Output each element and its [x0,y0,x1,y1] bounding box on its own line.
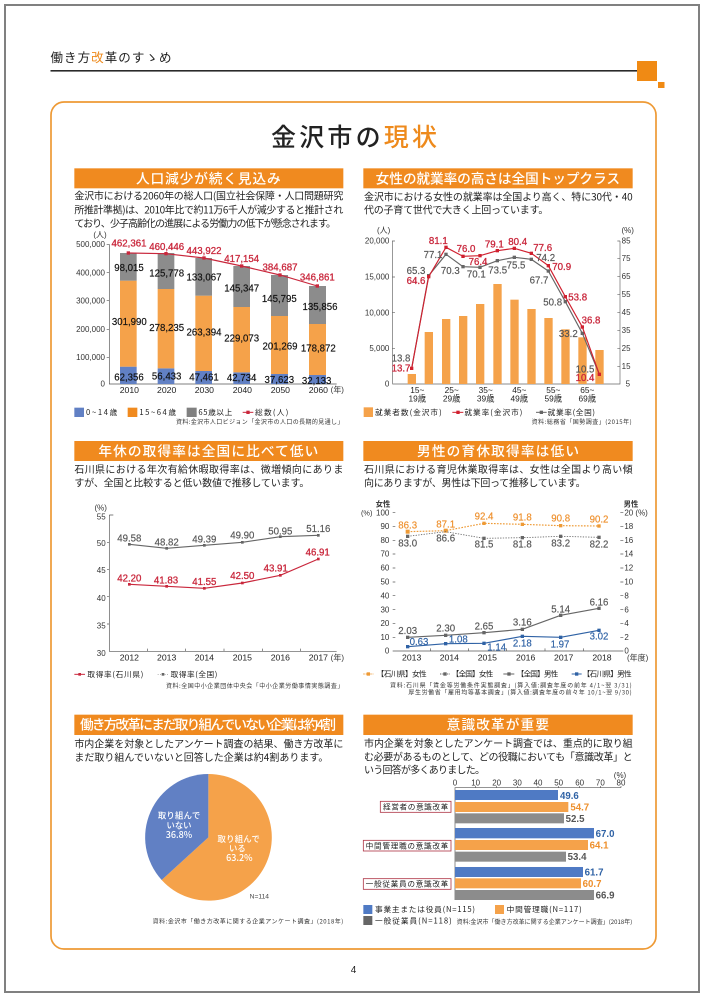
line chart: childcare leave: 1.14 [487,643,507,654]
stacked bar chart: population: 2020 [157,385,176,395]
line chart: childcare leave: 6 [624,605,629,614]
stacked bar chart: population: 42,734 [227,373,257,384]
combo chart: female employment: 25~ [445,385,459,395]
line chart: childcare leave: 100 [376,508,390,517]
line chart: childcare leave: 8 [624,591,629,600]
combo chart: female employment: 80.4 [508,237,528,248]
line chart: paid leave: 50 [97,539,106,548]
combo chart: female employment: 65.3 [407,266,425,277]
source: childcare leave: 厚生労働省「雇用均等基本調査」(算入値:調査年度の前々年 10/1~翌 9/30) [408,687,632,696]
stacked bar chart: population: 2010 [120,385,139,395]
pie chart: N=114 [250,893,269,900]
bar chart: mindset reform: 61.7 [585,868,603,879]
line chart: childcare leave: 16 [624,536,634,545]
combo chart: female employment: 35~ [479,385,493,395]
bar chart: mindset reform: 40 [534,779,543,788]
stacked bar chart: population: 400,000 [76,268,106,277]
pie chart [145,774,272,901]
label: executives: 経営者の意識改革 [383,802,449,813]
text block: population: 金沢市における2060年の総人口(国立社会保障・人口問題研究 [74,188,343,203]
text block: population [74,188,343,230]
combo chart: female employment: 15~ [410,385,425,395]
bar chart: mindset reform: 80 [617,779,626,788]
line chart: childcare leave: 14 [624,550,634,559]
line chart: paid leave: 49.90 [230,531,254,542]
stacked bar chart: population: 263,394 [187,327,222,338]
combo chart: female employment: 59歳 [545,394,563,404]
stacked bar chart: population: 145,347 [224,284,259,295]
bar chart: mindset reform: 70 [596,779,605,788]
combo chart: female employment: 77.6 [533,243,552,254]
combo chart: female employment: 13.8 [392,354,410,365]
page number: 4 [351,965,357,976]
legend: paid leave [74,669,217,680]
line chart: childcare leave: 90.2 [590,515,608,526]
stacked bar chart: population: 37,623 [265,375,294,386]
bar chart: mindset reform: 49.6 [560,791,579,802]
legend: mindset reform: 一般従業員(N=118) [375,915,452,926]
text block: childcare leave: 石川県における育児休業取得率は、女性は全国より高い傾 [364,461,633,476]
line chart: paid leave: 49.39 [192,534,216,545]
line chart: childcare leave: (%) [361,508,372,517]
legend: population: 0~14歳 [86,407,118,418]
combo chart: female employment: 55~ [546,385,561,395]
line chart: paid leave: (年) [331,652,344,662]
legend: population: 総数(人) [255,407,288,418]
bar chart: mindset reform: 67.0 [596,829,614,840]
text block: childcare leave [364,461,633,489]
combo chart: female employment: 73.5 [488,266,507,277]
combo chart: female employment: 65~ [580,385,595,395]
combo chart: female employment: (人) [377,226,391,235]
text block: paid leave [74,461,343,489]
combo chart: female employment: 10.5 [576,365,594,376]
source: childcare leave: 資料:石川県「賃金等労働条件実態調査」(算入値:調査年度の前年 4/1~翌 3/31) [390,681,632,690]
heading: population: 人口減少が続く見込み [136,167,281,187]
combo chart: female employment: 25 [622,344,631,353]
line chart: childcare leave: 40 [380,591,390,600]
stacked bar chart: population: 346,861 [300,273,335,284]
pie chart: 63.2% [226,851,253,864]
combo chart: female employment: 10,000 [365,308,390,317]
line chart: childcare leave: 2014 [440,653,459,663]
stacked bar chart: population: 98,015 [114,263,144,274]
stacked bar chart: population: 443,922 [187,246,221,257]
combo chart: female employment: 10.4 [576,373,595,384]
line chart: childcare leave: 0 [624,647,629,656]
bar chart: mindset reform: 54.7 [570,802,589,813]
stacked bar chart: population: 278,235 [149,323,184,334]
stacked bar chart: population [76,231,344,395]
combo chart: female employment: 49歳 [511,394,529,404]
combo chart: female employment: 13.7 [392,363,410,374]
stacked bar chart: population: 2030 [195,385,214,395]
line chart: paid leave: 2014 [195,653,214,663]
stacked bar chart: population: (人) [93,231,107,240]
heading: childcare leave [363,440,633,461]
stacked bar chart: population: 2060 [309,385,328,395]
stacked bar chart: population: 417,154 [224,254,260,265]
combo chart: female employment: 64.6 [407,276,425,287]
combo chart: female employment: 74.2 [536,253,555,264]
main panel [51,102,656,949]
stacked bar chart: population: 301,990 [112,317,147,328]
stacked bar chart: population: 462,361 [112,238,146,249]
bar chart: mindset reform: (%) [614,771,627,780]
line chart: paid leave: 48.82 [155,537,179,548]
legend: childcare leave: 【石川県】女性 [377,668,427,679]
bar chart: mindset reform: 30 [513,779,522,788]
combo chart: female employment: 75 [622,254,631,263]
stacked bar chart: population: 0 [101,380,106,389]
bar chart: mindset reform: 60 [575,779,585,788]
combo chart: female employment: 5 [626,380,631,389]
combo chart: female employment: 45 [622,308,631,317]
stacked bar chart: population: 2050 [271,385,290,395]
line chart: childcare leave: 87.1 [436,520,455,531]
combo chart: female employment: 70.1 [467,269,486,280]
line chart: childcare leave: 90.8 [551,514,570,525]
line chart: childcare leave: 男性 [624,498,639,509]
line chart: childcare leave: 6.16 [590,598,608,609]
pie chart: 36.8% [166,828,193,841]
line chart: paid leave: 42.20 [117,574,141,585]
combo chart: female employment: 75.5 [507,261,525,272]
stacked bar chart: population: 125,778 [149,269,184,280]
bar chart: mindset reform: 60.7 [583,879,601,890]
text block: reform not started: まだ取り組んでいないと回答した企業は約4割あります。 [74,749,328,764]
bar chart: mindset reform: 20 [492,779,502,788]
line chart: childcare leave: 80 [380,536,390,545]
legend: mindset reform: 事業主または役員(N=115) [375,904,475,915]
line chart: childcare leave: 83.2 [551,539,570,550]
text block: population: 所推計準拠)は、2010年比で約11万6千人が減少すると推計され [74,202,343,217]
combo chart: female employment: 50.8 [543,298,562,309]
line chart: paid leave: 2013 [157,653,176,663]
legend: childcare leave: 【全国】男性 [517,668,559,679]
combo chart: female employment: 70.3 [441,266,460,277]
combo chart: female employment: 45~ [512,385,527,395]
pie chart: 取り組んで [158,810,200,822]
line chart: paid leave: 41.55 [192,577,216,588]
panel: paid leave [74,440,344,690]
bar chart: mindset reform [453,771,627,901]
legend: female employment [364,407,595,418]
line chart: childcare leave: 2016 [516,653,535,663]
source: paid leave: 資料:全国中小企業団体中央会「中小企業労働事情実態調査」 [166,681,343,690]
stacked bar chart: population: 135,856 [303,302,337,313]
combo chart: female employment: 20,000 [365,237,390,246]
line chart: paid leave: 2016 [271,653,290,663]
stacked bar chart: population: 200,000 [76,325,106,334]
line chart: paid leave: 41.83 [154,576,178,587]
line chart: childcare leave: 4 [624,619,629,628]
combo chart: female employment: 69歳 [579,394,597,404]
text block: paid leave: すが、全国と比較すると低い数値で推移しています。 [74,474,309,489]
text block: reform not started [74,735,343,764]
source: reform not started: 資料:金沢市「働き方改革に関する企業アンケート調査」(2018年) [153,917,343,926]
combo chart: female employment: 29歳 [443,394,461,404]
line chart: childcare leave: 2015 [478,653,497,663]
stacked bar chart: population: (年) [331,385,344,395]
line chart: paid leave: 40 [97,594,106,603]
line chart: childcare leave: 81.8 [513,540,532,551]
page header [50,47,664,88]
text block: childcare leave: 向にありますが、男性は下回って推移しています。 [364,474,586,489]
source: female employment: 資料:総務省「国勢調査」(2015年) [532,417,632,426]
line chart: childcare leave: 81.5 [475,540,493,551]
bar chart: mindset reform: 53.4 [568,852,587,863]
line chart: paid leave: 50.95 [268,526,292,537]
line chart: childcare leave: 12 [624,564,634,573]
bar chart: mindset reform: 50 [554,779,564,788]
line chart: childcare leave: 0 [385,647,390,656]
label: employees: 一般従業員の意識改革 [366,879,449,890]
panel: reform not started [74,714,343,926]
combo chart: female employment: 15,000 [365,273,390,282]
stacked bar chart: population: 500,000 [76,240,106,249]
bar chart: mindset reform: 52.5 [566,814,585,825]
line chart: paid leave: 46.91 [306,548,330,559]
line chart: childcare leave: 91.8 [513,513,532,524]
stacked bar chart: population: 56,433 [152,371,181,382]
line chart: paid leave: 2017 [309,653,328,663]
combo chart: female employment [365,226,634,404]
combo chart: female employment: 36.8 [582,316,600,327]
page header: 働き方改革のすゝめ [50,47,172,66]
legend: mindset reform: 中間管理職(N=117) [507,904,582,915]
combo chart: female employment: (%) [621,226,634,235]
line chart: paid leave: 51.16 [306,524,330,535]
line chart: childcare leave: 2017 [554,653,573,663]
combo chart: female employment: 85 [622,237,631,246]
line chart: childcare leave: 3.02 [590,632,608,643]
line chart: childcare leave: 1.08 [449,634,468,645]
stacked bar chart: population: 300,000 [76,296,106,305]
combo chart: female employment: 39歳 [477,394,495,404]
stacked bar chart: population: 62,356 [114,373,144,384]
line chart: childcare leave: 2018 [592,653,612,663]
line chart: childcare leave: 83.0 [398,538,417,549]
legend: population: 65歳以上 [198,407,233,418]
line chart: childcare leave: 70 [380,550,390,559]
heading: reform not started: 働き方改革にまだ取り組んでいない企業は約4割 [80,714,336,734]
panel: female employment [363,167,634,426]
text block: mindset reform: 市内企業を対象としたアンケート調査では、重点的に取り組 [364,735,633,750]
source: childcare leave [390,681,632,696]
combo chart: female employment: 5,000 [369,344,390,353]
line chart: childcare leave: 18 [624,522,634,531]
legend: female employment: 就業者数(金沢市) [375,407,442,418]
stacked bar chart: population: 100,000 [76,353,106,362]
line chart: childcare leave: 2.03 [398,626,417,637]
text block: mindset reform: いう回答が多くありました。 [364,761,485,776]
line chart: childcare leave: 3.16 [513,618,532,629]
stacked bar chart: population: 47,461 [189,373,219,384]
line chart: childcare leave: 20 (%) [624,508,648,517]
text block: mindset reform [364,735,633,776]
line chart: childcare leave: 1.97 [551,640,569,651]
text block: mindset reform: む必要があるものとして、どの役職においても「意識改革」と [364,748,633,763]
title: 金沢市の現状 [271,118,437,154]
line chart: paid leave: 42.50 [230,571,254,582]
line chart: paid leave: 49.58 [117,533,141,544]
text block: female employment: 金沢市における女性の就業率は全国より高く、特に30代・40 [364,188,633,203]
pie chart: いる [229,843,246,855]
heading: population [74,167,343,188]
pie chart: いない [166,819,191,831]
line chart: childcare leave: 86.3 [398,521,417,532]
legend: population: 15~64歳 [139,407,176,418]
combo chart: female employment: 76.0 [457,244,475,255]
line chart: childcare leave: 60 [380,564,390,573]
bar chart: mindset reform: 10 [471,779,481,788]
legend: female employment: 就業率(全国) [548,407,595,418]
text block: paid leave: 石川県における年次有給休暇取得率は、微増傾向にありま [74,461,343,476]
combo chart: female employment: 81.1 [429,236,448,247]
line chart: childcare leave: 30 [380,605,390,614]
stacked bar chart: population: 133,067 [187,273,221,284]
legend: childcare leave: 【全国】女性 [452,668,494,679]
line chart: paid leave: 2015 [233,653,252,663]
source: mindset reform: 資料:金沢市「働き方改革に関する企業アンケート調査」(2018年) [457,917,632,926]
label: managers: 中間管理職の意識改革 [366,840,449,851]
line chart: childcare leave: 90 [380,522,390,531]
legend: female employment: 就業率(金沢市) [464,407,522,418]
line chart: childcare leave: 2.30 [436,624,455,635]
heading: mindset reform [363,714,633,735]
line chart: paid leave [94,503,344,663]
stacked bar chart: population: 2040 [233,385,252,395]
combo chart: female employment: 19歳 [409,394,427,404]
legend: childcare leave [363,668,632,679]
stacked bar chart: population: 145,795 [262,294,297,305]
pie chart: 取り組んで [217,833,260,845]
legend: paid leave: 取得率(石川県) [87,669,143,680]
line chart: paid leave: 55 [97,512,106,521]
line chart: childcare leave: 2 [624,633,629,642]
line chart: paid leave: (%) [94,503,107,512]
stacked bar chart: population: 384,687 [263,262,297,273]
combo chart: female employment: 67.7 [530,275,548,286]
line chart: childcare leave: 女性 [376,498,391,509]
bar chart: mindset reform: 64.1 [590,840,609,851]
combo chart: female employment: 76.4 [469,257,488,268]
line chart: childcare leave: 10 [380,633,390,642]
combo chart: female employment: 33.2 [559,329,578,340]
stacked bar chart: population: 178,872 [301,344,336,355]
line chart: childcare leave: 2.65 [475,621,493,632]
combo chart: female employment: 35 [622,326,631,335]
combo chart: female employment: 79.1 [485,239,504,250]
panel: childcare leave [361,440,649,696]
panel: mindset reform [363,714,633,926]
heading: mindset reform: 意識改革が重要 [447,714,549,734]
combo chart: female employment: 77.1 [424,250,442,261]
line chart: paid leave: 43.91 [264,563,288,574]
line chart: childcare leave: 20 [380,619,390,628]
line chart: paid leave: 35 [97,622,106,631]
line chart: childcare leave: 0.63 [410,637,428,648]
line chart: childcare leave: 5.14 [551,604,571,615]
combo chart: female employment: 53.8 [568,292,587,303]
combo chart: female employment: 65 [622,272,631,281]
legend: childcare leave: 【石川県】男性 [583,668,632,679]
line chart: childcare leave: 92.4 [475,512,494,523]
line chart: childcare leave: (年度) [627,652,649,662]
bar chart: mindset reform: 66.9 [596,890,615,901]
line chart: paid leave: 30 [97,649,106,658]
line chart: childcare leave: 2.18 [513,638,532,649]
combo chart: female employment: 0 [385,380,390,389]
stacked bar chart: population: 460,446 [149,242,184,253]
combo chart: female employment: 55 [622,290,631,299]
legend: population [74,407,288,418]
line chart: childcare leave: 2013 [402,653,421,663]
bar chart: mindset reform: 0 [453,779,458,788]
text block: female employment: 代の子育て世代で大きく上回っています。 [364,202,548,217]
combo chart: female employment: 70.9 [552,262,571,273]
text block: population: ており、少子高齢化の進展による労働力の低下が懸念されます。 [74,215,336,230]
stacked bar chart: population: 32,133 [302,376,331,387]
text block: reform not started: 市内企業を対象としたアンケート調査の結果、働き方改革に [74,735,343,750]
panel: population decline [74,167,344,426]
line chart: childcare leave: 86.6 [436,534,455,545]
line chart: childcare leave: 50 [380,578,390,587]
stacked bar chart: population: 229,073 [224,334,259,345]
text block: female employment [364,188,633,217]
line chart: paid leave: 45 [97,566,106,575]
heading: female employment: 女性の就業率の高さは全国トップクラス [376,167,620,187]
line chart: childcare leave: 10 [624,578,634,587]
stacked bar chart: population: 201,269 [263,342,297,353]
combo chart: female employment: 15 [622,362,631,371]
legend: paid leave: 取得率(全国) [171,669,217,680]
line chart: childcare leave: 82.2 [590,540,608,551]
heading: childcare leave: 男性の育休取得率は低い [417,440,579,460]
line chart: childcare leave [361,498,649,663]
legend: mindset reform [363,904,582,926]
heading: paid leave: 年休の取得率は全国に比べて低い [98,440,318,460]
line chart: paid leave: 2012 [120,653,139,663]
source: population: 資料:金沢市人口ビジョン「金沢市の人口の長期的見通し」 [176,417,343,426]
